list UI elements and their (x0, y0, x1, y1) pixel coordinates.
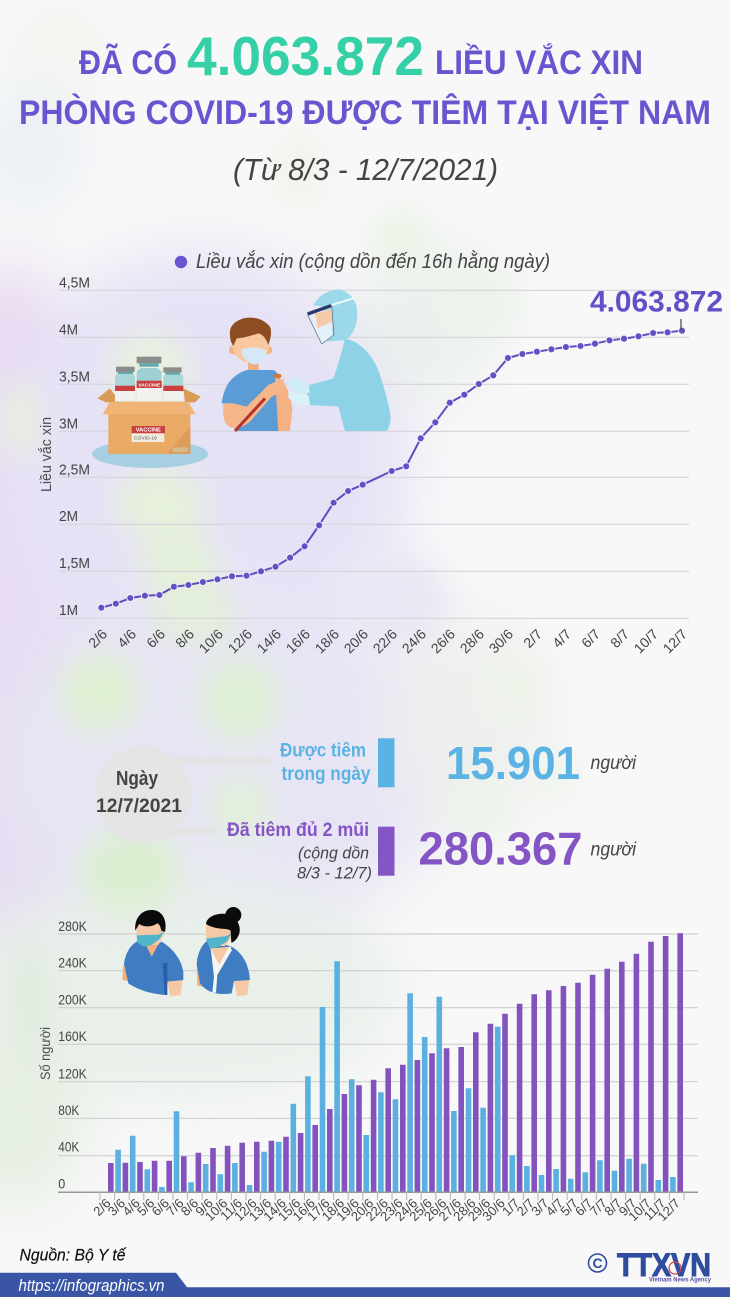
stat: fully vaccinated: 280.367 (418, 822, 582, 874)
title: ĐÃ CÓ (79, 44, 177, 82)
bar chart: daily and cumulative people vaccinated: 11/6 (217, 1196, 245, 1223)
line chart: cumulative vaccine doses: 2/6 (85, 626, 110, 651)
footer bar with website: https://infographics.vn (18, 1276, 164, 1295)
line chart: cumulative vaccine doses: 26/6 (428, 626, 458, 656)
source note: Nguồn: Bộ Y tế (20, 1246, 127, 1265)
headline number: 4.063.872 (187, 25, 424, 87)
date circle with connectors: Ngày (116, 768, 159, 790)
icon: boy receiving injection (222, 318, 292, 431)
bar chart: daily and cumulative people vaccinated: 17/6 (304, 1196, 333, 1224)
subtitle: date range: (Từ 8/3 - 12/7/2021) (233, 152, 498, 187)
line chart: cumulative vaccine doses: 12/7 (660, 626, 690, 656)
bar chart: daily and cumulative people vaccinated: Số người (37, 1027, 53, 1080)
bar chart: daily and cumulative people vaccinated: 29/6 (465, 1196, 493, 1224)
line chart: cumulative vaccine doses: 8/6 (172, 626, 197, 651)
stat: vaccinated in the day: 15.901 (446, 737, 580, 789)
line chart: cumulative vaccine doses: 4.063.872 (590, 285, 723, 318)
stat: fully vaccinated (227, 820, 637, 882)
line chart: cumulative vaccine doses: 2M (59, 508, 78, 525)
bar chart: daily and cumulative people vaccinated: 16/6 (290, 1196, 318, 1224)
bar chart: daily and cumulative people vaccinated: 13/6 (246, 1196, 274, 1224)
icon: vaccine box with vials: COVID-19 (134, 436, 157, 442)
bar chart: daily and cumulative people vaccinated: 5/6 (134, 1196, 157, 1219)
bar chart: daily and cumulative people vaccinated: 19/6 (333, 1196, 362, 1224)
line chart: cumulative vaccine doses: 4,5M (59, 274, 90, 291)
line chart: cumulative vaccine doses: 10/6 (196, 626, 226, 656)
line chart: cumulative vaccine doses: 30/6 (486, 626, 516, 656)
line chart: cumulative vaccine doses: 8/7 (607, 626, 632, 651)
bar chart: daily and cumulative people vaccinated: 28/6 (450, 1196, 479, 1224)
bar chart: daily and cumulative people vaccinated: 11/7 (641, 1196, 668, 1223)
line chart: cumulative vaccine doses: 4M (59, 321, 78, 338)
icon: masked woman (197, 907, 250, 997)
bar chart: daily and cumulative people vaccinated: 20/6 (348, 1196, 376, 1224)
bar chart: daily and cumulative people vaccinated: 14/6 (260, 1196, 289, 1224)
bar chart: daily and cumulative people vaccinated: 2/7 (514, 1196, 537, 1219)
date circle with connectors: 12/7/2021 (96, 796, 182, 817)
bar chart: daily and cumulative people vaccinated: 7/6 (163, 1196, 187, 1219)
line chart: cumulative vaccine doses: 16/6 (283, 626, 313, 656)
stat: fully vaccinated: 8/3 - 12/7) (297, 863, 372, 882)
bar chart: daily and cumulative people vaccinated: 9/7 (616, 1196, 639, 1219)
icon: vaccine box with vials: VACCINE (138, 382, 161, 388)
logo: TTXVN: TTXVN (617, 1247, 711, 1283)
bar chart: daily and cumulative people vaccinated: 25/6 (406, 1196, 435, 1224)
bar chart: daily and cumulative people vaccinated: 10/7 (625, 1196, 654, 1224)
line chart: cumulative vaccine doses: 1M (59, 602, 78, 619)
line chart: cumulative vaccine doses: 4/6 (114, 626, 139, 651)
bar chart: daily and cumulative people vaccinated: 5/7 (557, 1196, 581, 1219)
bar chart: daily and cumulative people vaccinated: 26/6 (421, 1196, 449, 1224)
bar chart: daily and cumulative people vaccinated: 22/6 (363, 1196, 391, 1224)
line chart: cumulative vaccine doses: 4/7 (549, 626, 574, 651)
stat: fully vaccinated: (cộng dồn (298, 843, 369, 862)
bar chart: daily and cumulative people vaccinated: 40K (58, 1140, 79, 1155)
stat: vaccinated in the day (280, 737, 637, 789)
stat: fully vaccinated: Đã tiêm đủ 2 mũi (227, 820, 369, 841)
bar chart: daily and cumulative people vaccinated: 280K (58, 919, 87, 934)
line chart: cumulative vaccine doses: 28/6 (457, 626, 487, 656)
line chart: cumulative vaccine doses: 22/6 (370, 626, 400, 656)
line chart: cumulative vaccine doses: 6/6 (143, 626, 168, 651)
bar chart: daily and cumulative people vaccinated: 10/6 (202, 1196, 230, 1224)
bar chart: daily and cumulative people vaccinated: 18/6 (319, 1196, 347, 1224)
panel: daily figures for 12/7/2021 (94, 737, 637, 882)
icon: vaccine box with vials (92, 357, 208, 468)
bar chart: daily and cumulative people vaccinated: 120K (58, 1066, 87, 1081)
bar chart: daily and cumulative people vaccinated: 30/6 (479, 1196, 508, 1224)
bar chart: daily and cumulative people vaccinated: 27/6 (436, 1196, 464, 1224)
line chart: cumulative vaccine doses: 3,5M (59, 368, 90, 385)
bar chart: daily and cumulative people vaccinated: 7/7 (587, 1196, 610, 1219)
logo: TTXVN: Vietnam News Agency (649, 1276, 711, 1284)
logo: TTXVN: C (592, 1255, 603, 1271)
bar chart: daily and cumulative people vaccinated: 80K (58, 1103, 79, 1118)
bar chart: daily and cumulative people vaccinated: 3/7 (528, 1196, 552, 1219)
bar chart: daily and cumulative people vaccinated (37, 919, 698, 1224)
bar chart: daily and cumulative people vaccinated: 3/6 (105, 1196, 128, 1219)
bar chart: daily and cumulative people vaccinated: 6/6 (149, 1196, 172, 1219)
line chart: cumulative vaccine doses: 2,5M (59, 461, 90, 478)
bar chart: daily and cumulative people vaccinated: 23/6 (377, 1196, 406, 1224)
bar chart: daily and cumulative people vaccinated: 2/6 (90, 1196, 114, 1219)
stat: fully vaccinated: người (590, 840, 637, 861)
icon: masked man (122, 910, 183, 997)
bar chart: daily and cumulative people vaccinated: 15/6 (275, 1196, 303, 1224)
bar chart: daily and cumulative people vaccinated: 6/7 (572, 1196, 595, 1219)
line chart: cumulative vaccine doses: 2/7 (520, 626, 545, 651)
line chart: cumulative vaccine doses: 12/6 (225, 626, 255, 656)
logo: TTXVN (588, 1247, 711, 1284)
bar chart: daily and cumulative people vaccinated: 12/6 (231, 1196, 260, 1224)
line chart: cumulative vaccine doses: 20/6 (341, 626, 371, 656)
bar chart: daily and cumulative people vaccinated: 200K (58, 992, 87, 1007)
icon: nurse in protective suit (287, 289, 391, 431)
bar chart: daily and cumulative people vaccinated: 1/7 (499, 1196, 522, 1219)
title: LIỀU VẮC XIN (435, 44, 643, 82)
line chart: cumulative vaccine doses: 6/7 (578, 626, 603, 651)
bar chart: daily and cumulative people vaccinated: 160K (58, 1029, 87, 1044)
bar chart: daily and cumulative people vaccinated: 240K (58, 956, 87, 971)
bar chart: daily and cumulative people vaccinated: 8/6 (178, 1196, 201, 1219)
line chart: cumulative vaccine doses: 10/7 (631, 626, 661, 656)
bar chart: daily and cumulative people vaccinated: 0 (58, 1176, 65, 1191)
line chart: cumulative vaccine doses: 18/6 (312, 626, 342, 656)
footer bar with website (0, 1273, 730, 1297)
line chart: cumulative vaccine doses: Liều vắc xin (38, 417, 55, 492)
line chart: cumulative vaccine doses: 14/6 (254, 626, 284, 656)
stat: vaccinated in the day: người (590, 753, 637, 774)
stat: vaccinated in the day: Được tiêm (280, 740, 366, 762)
line chart: cumulative vaccine doses: 1,5M (59, 555, 90, 572)
line chart: cumulative vaccine doses (38, 274, 723, 656)
bar chart: daily and cumulative people vaccinated: 4/6 (119, 1196, 143, 1219)
bar chart: daily and cumulative people vaccinated: 12/7 (655, 1196, 683, 1224)
bar chart: daily and cumulative people vaccinated: 9/6 (192, 1196, 216, 1219)
legend: line chart: Liều vắc xin (cộng dồn đến 16h hằng ngày) (196, 250, 550, 273)
icon: vaccine box with vials: VACCINE (136, 428, 161, 434)
line chart: cumulative vaccine doses: 3M (59, 415, 78, 432)
bar chart: daily and cumulative people vaccinated: 8/7 (601, 1196, 625, 1219)
stat: vaccinated in the day: trong ngày (282, 763, 371, 785)
title (19, 25, 711, 132)
line chart: cumulative vaccine doses: 24/6 (399, 626, 429, 656)
bar chart: daily and cumulative people vaccinated: 24/6 (392, 1196, 420, 1224)
date circle with connectors (94, 746, 270, 842)
bar chart: daily and cumulative people vaccinated: 4/7 (543, 1196, 566, 1219)
